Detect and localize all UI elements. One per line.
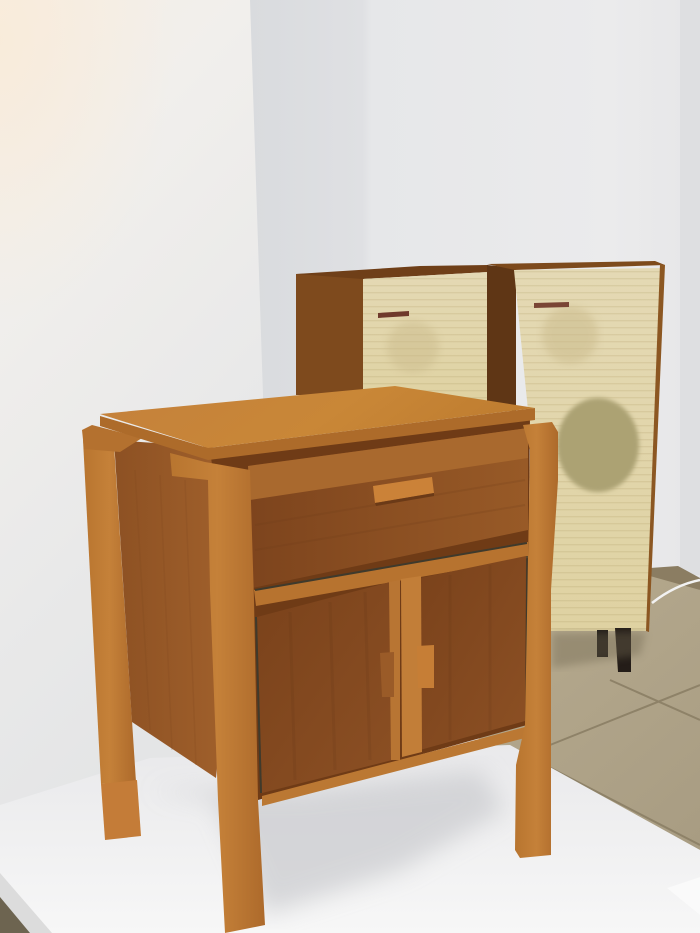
right speaker badge <box>534 302 569 308</box>
plinth shadow <box>150 770 505 915</box>
right speaker upper cone <box>542 306 598 364</box>
front left leg <box>170 453 265 933</box>
left door <box>257 582 400 793</box>
left speaker badge <box>378 311 409 318</box>
door grain <box>290 565 490 780</box>
left speaker cone <box>387 321 439 373</box>
right speaker lower cone <box>557 398 639 492</box>
speaker legs <box>597 630 608 657</box>
rear left leg <box>83 440 141 840</box>
plinth front edge <box>0 873 52 933</box>
side panel grain <box>135 470 196 765</box>
bottom rail <box>262 727 525 806</box>
left speaker grille <box>363 272 488 402</box>
label card <box>667 877 700 915</box>
floor tiles <box>380 566 700 850</box>
side panel <box>114 440 250 778</box>
right speaker grille <box>514 268 662 631</box>
drawer handle <box>373 477 434 503</box>
right door <box>420 556 526 750</box>
left wall <box>0 0 263 805</box>
rail below drawer <box>254 542 528 606</box>
top board <box>100 386 535 460</box>
drawer <box>248 428 528 588</box>
cabinet <box>82 386 558 933</box>
far right wall edge <box>680 0 700 575</box>
speaker shadow on floor <box>552 632 646 668</box>
speaker: right <box>487 261 665 672</box>
door stiles <box>389 580 400 760</box>
door handles <box>380 645 434 697</box>
front carcass back <box>210 415 530 800</box>
white plinth <box>0 745 700 933</box>
back wall <box>250 0 700 600</box>
drawer grain <box>255 480 525 550</box>
side rail <box>82 425 142 452</box>
front right leg <box>515 422 558 858</box>
speaker: left <box>296 265 488 402</box>
